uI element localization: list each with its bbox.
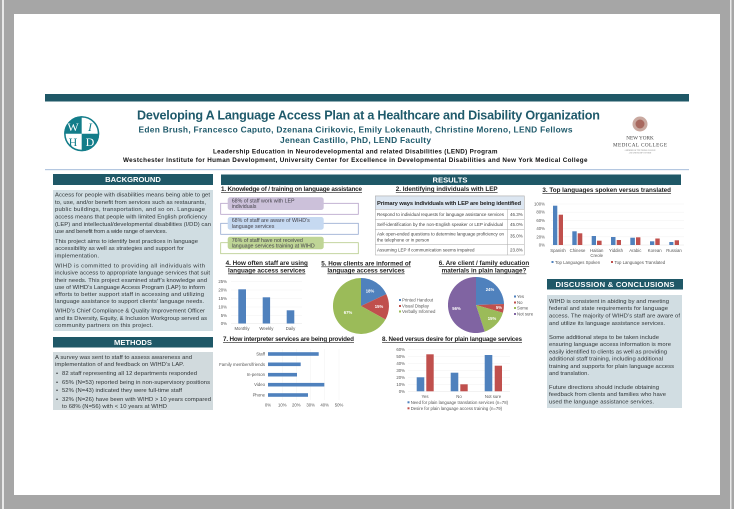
heading 6 bbox=[439, 260, 529, 274]
bar chart: languages: 80% bbox=[536, 210, 545, 215]
pie legend: Yes bbox=[517, 294, 524, 299]
callout: no training bbox=[221, 237, 358, 254]
bar chart: languages: Creole bbox=[590, 253, 604, 258]
panel: 3. languages chart bbox=[534, 187, 684, 265]
pie legend bbox=[399, 298, 436, 314]
bar chart: languages: 20% bbox=[536, 234, 545, 239]
methods text bbox=[55, 355, 211, 410]
chart legend: Top Languages Translated bbox=[614, 260, 666, 265]
table bbox=[375, 196, 524, 255]
table: Assuming LEP if communication seems impaired bbox=[377, 248, 475, 252]
table: the telephone or in person bbox=[377, 238, 430, 242]
bar chart: frequency: 20% bbox=[218, 288, 227, 292]
bar chart: languages: Haitian bbox=[590, 248, 604, 253]
heading 4 bbox=[226, 260, 308, 274]
background text: This project aims to identify best practices in language bbox=[55, 239, 198, 245]
table: Ask open-ended questions to determine language proficiency on bbox=[377, 232, 504, 236]
table: 35.0% bbox=[510, 234, 523, 238]
bar chart: languages: Arabic bbox=[629, 248, 642, 253]
bar chart: languages bbox=[534, 202, 684, 265]
heading 5 bbox=[321, 260, 412, 274]
table: Self-identification by the non-English speaker or LEP individual bbox=[377, 222, 503, 227]
pie chart: plain language: 5% bbox=[496, 305, 502, 310]
affiliations: Westchester Institute for Human Development, University Center for Excellence in Developmental Disabilities and New York Medical College bbox=[123, 157, 588, 164]
heading 4: language access services bbox=[228, 268, 306, 274]
logo: WIHD: H bbox=[69, 135, 78, 149]
methods text: • bbox=[56, 380, 58, 386]
background text bbox=[55, 192, 211, 329]
callout: work with LEP: 68% of staff work with LEP bbox=[232, 198, 295, 204]
methods text: • bbox=[56, 371, 58, 377]
bar chart: need versus desire: 30% bbox=[396, 368, 405, 373]
discussion text: additional staff training, including additional bbox=[549, 356, 663, 362]
pie chart: informed: 15% bbox=[375, 304, 383, 309]
discussion text: Some additional steps to be taken include bbox=[549, 335, 659, 341]
bar chart: languages: Chinese bbox=[570, 248, 586, 253]
pie legend: Not sure bbox=[517, 312, 534, 317]
bar chart: interpreter: 50% bbox=[335, 402, 343, 408]
discussion text: easily identified to clients as well as providing bbox=[549, 349, 667, 355]
bar chart: need versus desire: Not sure bbox=[485, 394, 502, 399]
bar chart: interpreter: Staff bbox=[256, 352, 266, 356]
background text: accessibility as well as strategies and support for bbox=[55, 246, 184, 252]
bar chart: languages: 100% bbox=[534, 202, 545, 206]
authors bbox=[138, 124, 573, 145]
logo: WIHD: W bbox=[67, 120, 79, 134]
methods text: 65% (N=53) reported being in non-supervisory positions bbox=[62, 380, 210, 386]
heading 8: 8. Need versus desire for plain language services bbox=[382, 336, 522, 343]
bar chart: interpreter: Family members/friends bbox=[219, 362, 265, 367]
pie legend: No bbox=[517, 300, 523, 305]
background text: use and benefit from a wide range of services. bbox=[55, 229, 167, 235]
discussion text: feedback from clients and families who have bbox=[549, 392, 666, 398]
panel: discussion and conclusions: DISCUSSION & CONCLUSIONS bbox=[556, 280, 674, 289]
heading 4: 4. How often staff are using bbox=[226, 260, 308, 267]
panel: 4. staff use chart bbox=[218, 260, 308, 331]
logo: WIHD: I bbox=[87, 120, 93, 134]
panel: discussion and conclusions bbox=[547, 279, 683, 408]
bar chart: languages: Spanish bbox=[550, 248, 566, 253]
background text: implementation. bbox=[55, 253, 99, 259]
heading 3: 3. Top languages spoken versus translated bbox=[542, 187, 671, 194]
panel: results header bbox=[221, 174, 681, 185]
background text: (LEP) and intellectual/developmental disabilities (I/DD) can bbox=[55, 222, 211, 228]
bar chart: interpreter: Phone bbox=[253, 392, 266, 398]
bar chart: frequency bbox=[218, 279, 302, 331]
table: 45.0% bbox=[510, 222, 523, 227]
bar chart: interpreter: Video bbox=[254, 382, 266, 387]
pie chart: plain language: 56% bbox=[452, 306, 461, 311]
logo: New York Medical College: A MEMBER OF THE TOURO COLLEGE bbox=[624, 149, 657, 152]
background text: inclusive access to appropriate language services that suit bbox=[55, 270, 210, 276]
title: Developing A Language Access Plan at a Healthcare and Disability Organization bbox=[137, 108, 600, 122]
panel: background: BACKGROUND bbox=[105, 175, 161, 184]
background text: to, use, and/or benefit from services such as restaurants, bbox=[55, 200, 206, 206]
bar chart: frequency: 0% bbox=[221, 321, 227, 326]
background text: language assistance to support clients’ language needs. bbox=[55, 299, 204, 305]
table: Primary ways individuals with LEP are being identified bbox=[377, 201, 521, 207]
pie chart: informed: 18% bbox=[366, 288, 374, 293]
top banner bar bbox=[45, 94, 689, 102]
bar chart: frequency: Weekly bbox=[259, 326, 274, 331]
pie legend: Some bbox=[517, 306, 529, 311]
background text: public buildings, transportation, and so on. Language bbox=[55, 207, 205, 213]
affiliations bbox=[123, 149, 588, 164]
discussion text: training and supports for plain language access bbox=[549, 364, 674, 370]
panel: 1. knowledge bbox=[221, 186, 362, 254]
heading 1: 1. Knowledge of / training on language assistance bbox=[221, 186, 362, 193]
discussion text: access. The majority of WIHD’s staff are aware of bbox=[549, 313, 680, 319]
heading 2: 2. Identifying individuals with LEP bbox=[396, 186, 498, 193]
panel: background bbox=[53, 174, 213, 331]
bar chart: languages: 40% bbox=[536, 226, 545, 231]
bar chart: need versus desire: 50% bbox=[396, 354, 405, 359]
pie legend: Verbally Informed bbox=[402, 309, 436, 314]
methods text: • bbox=[56, 388, 58, 394]
panel: methods bbox=[53, 337, 213, 410]
background text: Access for people with disabilities means being able to get bbox=[55, 192, 210, 198]
logo: New York Medical College: NEW YORK bbox=[626, 136, 654, 142]
discussion text bbox=[549, 299, 680, 405]
discussion text: WIHD is consistent in abiding by and meeting bbox=[549, 299, 669, 305]
logo: WIHD: D bbox=[86, 135, 95, 149]
pie chart: informed: 67% bbox=[344, 310, 352, 315]
discussion text: and utilize its language assistance services. bbox=[549, 321, 665, 327]
logo: New York Medical College: MEDICAL COLLEGE bbox=[613, 142, 667, 148]
bar chart: interpreter bbox=[219, 349, 343, 408]
methods text: 82 staff representing all 12 departments responded bbox=[62, 371, 197, 377]
table: 23.8% bbox=[510, 248, 523, 252]
discussion text: used the language assistance services. bbox=[549, 399, 654, 405]
pie legend: Printed Handout bbox=[402, 298, 434, 303]
callout: aware of services: language services bbox=[232, 224, 275, 230]
heading 6: materials in plain language? bbox=[442, 268, 526, 274]
bar chart: languages: Yiddish bbox=[609, 248, 624, 253]
methods text: • bbox=[56, 397, 58, 403]
background text: WIHD is committed to providing all individuals with bbox=[55, 263, 205, 269]
bar chart: need versus desire: Yes bbox=[421, 394, 429, 399]
panel: 6. plain language pie bbox=[439, 260, 534, 333]
table: Respond to individual requests for language assistance services bbox=[377, 212, 505, 217]
bar chart: need versus desire: 0% bbox=[399, 389, 405, 394]
background text: efforts to better support staff in accessing and utilizing bbox=[55, 292, 204, 298]
bar chart: interpreter: 0% bbox=[265, 402, 271, 408]
panel: 8. need versus desire chart bbox=[382, 336, 522, 411]
bar chart: frequency: Monthly bbox=[234, 326, 250, 331]
methods text: 52% (N=43) indicated they were full-time staff bbox=[62, 388, 182, 394]
bar chart: need versus desire: No bbox=[456, 394, 462, 399]
heading 5: language access services bbox=[327, 268, 405, 274]
bar chart: languages: 60% bbox=[536, 218, 545, 223]
pie chart: plain language bbox=[448, 277, 504, 333]
callout: work with LEP bbox=[221, 197, 358, 214]
bar chart: need versus desire: 10% bbox=[396, 382, 405, 387]
chart legend: Top Languages Spoken bbox=[555, 260, 601, 265]
background text: access means that people with limited English proficiency bbox=[55, 214, 207, 220]
bar chart: frequency: Daily bbox=[286, 326, 296, 331]
pie chart: plain language: 24% bbox=[486, 287, 494, 292]
pie chart: plain language: 15% bbox=[488, 316, 496, 321]
methods text: 32% (N=26) have been with WIHD > 10 years compared bbox=[62, 397, 211, 403]
discussion text: and translation. bbox=[549, 371, 589, 377]
logo: WIHD bbox=[64, 116, 99, 151]
background text: community partners on this project. bbox=[55, 323, 153, 329]
panel: methods: METHODS bbox=[114, 338, 152, 347]
authors: Eden Brush, Francesco Caputo, Dzenana Cirikovic, Emily Lokenauth, Christine Moreno, LEND Fellows bbox=[138, 124, 573, 134]
pie chart: informed bbox=[333, 278, 389, 334]
callout: aware of services: 68% of staff are aware of WIHD’s bbox=[232, 218, 310, 224]
bar chart: interpreter: In-person bbox=[247, 372, 266, 377]
bar chart: need versus desire: 40% bbox=[396, 361, 405, 366]
background text: use of WIHD’s Language Access Program (LAP) to inform bbox=[55, 285, 205, 291]
background text: WIHD’s Chief Compliance & Quality Improvement Officer bbox=[55, 308, 205, 314]
authors: Jenean Castillo, PhD, LEND Faculty bbox=[280, 135, 431, 145]
bar chart: interpreter: 20% bbox=[292, 402, 301, 408]
discussion text: ensuring language access information is more bbox=[549, 342, 671, 348]
panel: 5. clients informed pie bbox=[321, 260, 436, 334]
bar chart: frequency: 25% bbox=[218, 279, 227, 284]
bar chart: frequency: 15% bbox=[218, 296, 227, 301]
bar chart: interpreter: 40% bbox=[320, 402, 329, 408]
bar chart: frequency: 10% bbox=[218, 304, 227, 310]
discussion text: Future directions should include obtaining bbox=[549, 385, 659, 391]
chart legend: Desire for plain language access training (n=79) bbox=[411, 406, 503, 411]
pie legend bbox=[514, 294, 534, 317]
divider line bbox=[45, 169, 689, 170]
bar chart: interpreter: 10% bbox=[278, 402, 287, 408]
chart legend bbox=[408, 400, 509, 411]
background text: and its Diversity, Equity, & Inclusion Workgroup served as bbox=[55, 316, 207, 322]
bar chart: languages: Russian bbox=[666, 248, 682, 253]
background text: their needs. This project examined staff’s knowledge and bbox=[55, 278, 207, 284]
affiliations: Leadership Education in Neurodevelopmental and related Disabilities (LEND) Program bbox=[213, 149, 498, 156]
panel: results header: RESULTS bbox=[433, 176, 467, 185]
bar chart: frequency: 5% bbox=[221, 313, 227, 318]
callout: no training: 76% of staff have not received bbox=[232, 238, 303, 244]
methods text: implementation of and feedback on WIHD’s LAP. bbox=[55, 362, 184, 368]
chart legend bbox=[552, 260, 666, 265]
chart legend: Need for plain language translation services (n=78) bbox=[411, 400, 509, 405]
bar chart: interpreter: 30% bbox=[306, 402, 315, 408]
bar chart: need versus desire bbox=[396, 347, 510, 411]
discussion text: federal and state requirements for language bbox=[549, 306, 668, 312]
logo: New York Medical College bbox=[613, 116, 667, 154]
methods text: to 68% (N=56) with < 10 years at WIHD bbox=[62, 404, 167, 410]
bar chart: need versus desire: 20% bbox=[396, 375, 405, 380]
callout: work with LEP: individuals bbox=[232, 204, 257, 210]
panel: 7. interpreter services chart bbox=[219, 336, 354, 408]
heading 5: 5. How clients are informed of bbox=[321, 260, 412, 268]
heading 7: 7. How interpreter services are being provided bbox=[223, 336, 354, 343]
bar chart: need versus desire: 60% bbox=[396, 347, 405, 352]
panel: 2. identifying bbox=[375, 186, 524, 255]
pie legend: Visual Display bbox=[402, 304, 430, 309]
logo: New York Medical College: AND UNIVERSITY SYSTEM bbox=[629, 152, 652, 154]
table: 46.3% bbox=[510, 212, 523, 217]
callout: no training: language services training at WIHD bbox=[232, 244, 315, 250]
bar chart: languages: Korean bbox=[648, 248, 662, 253]
bar chart: languages: 0% bbox=[539, 242, 545, 248]
methods text: A survey was sent to staff to assess awareness and bbox=[55, 355, 192, 361]
heading 6: 6. Are client / family education bbox=[439, 260, 529, 267]
callout: aware of services bbox=[221, 217, 358, 234]
